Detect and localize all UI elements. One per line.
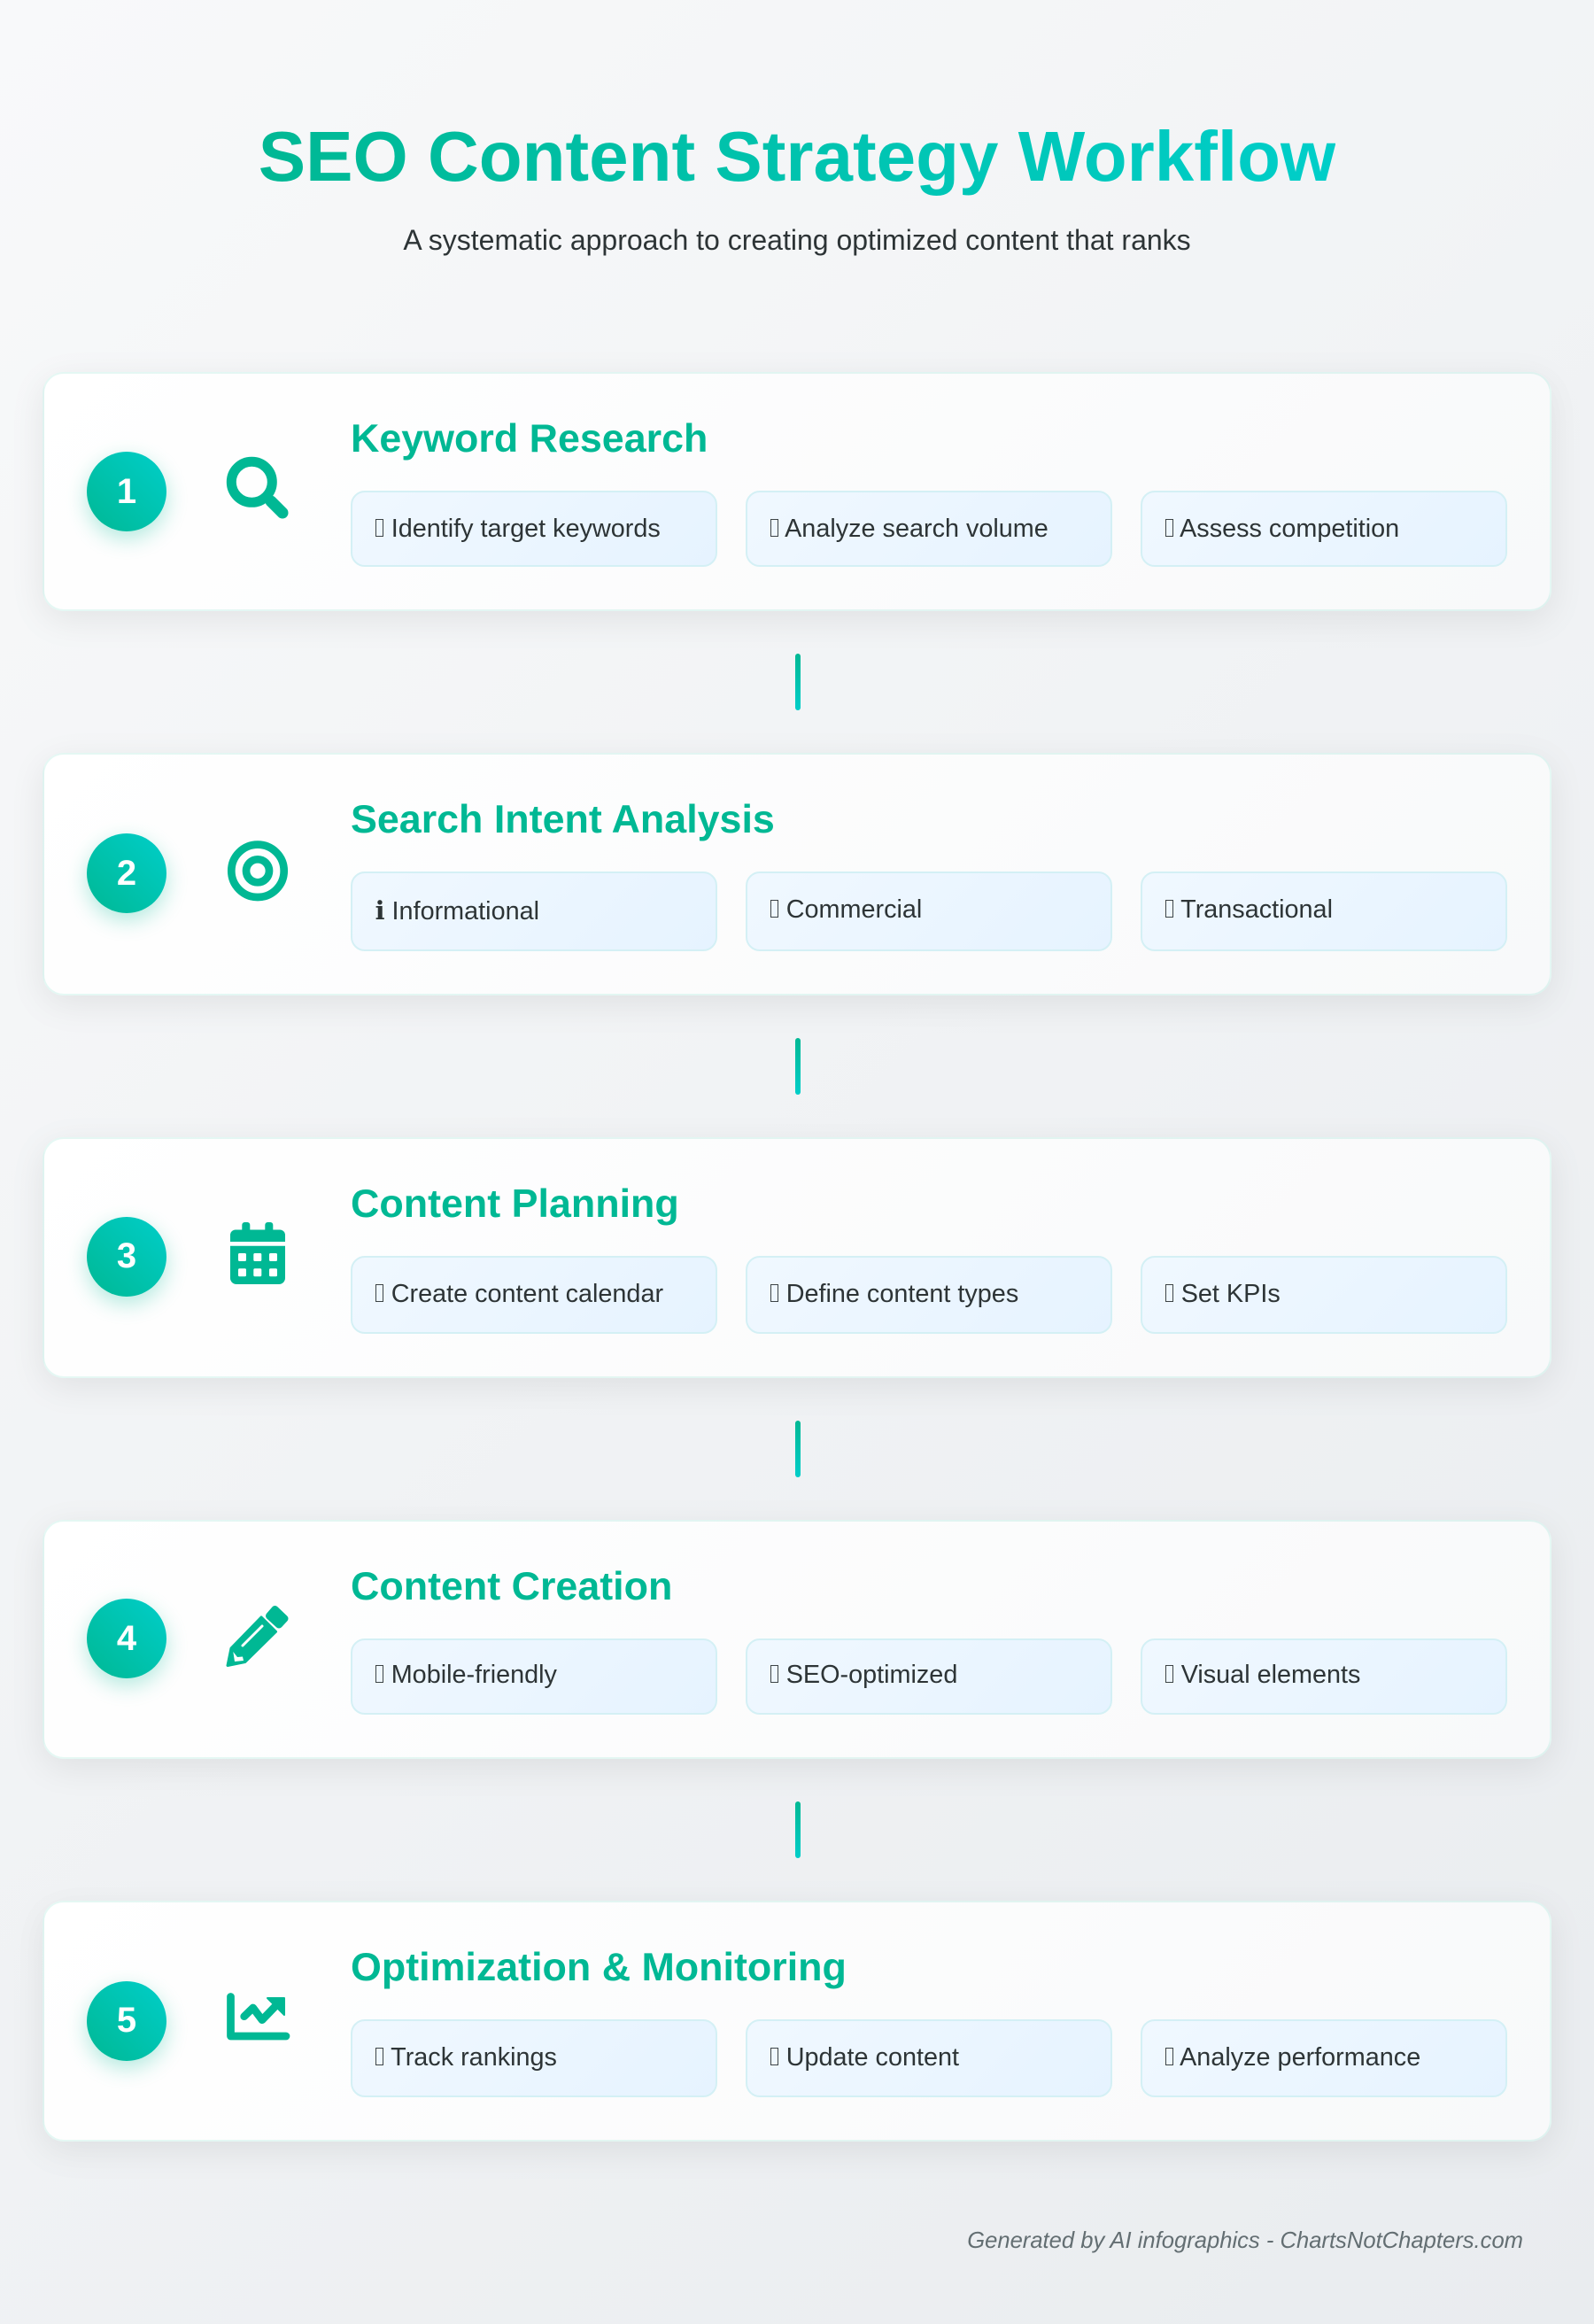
chip: create content calendar: Create content calendar — [391, 1279, 663, 1307]
panel: step 1 keyword research — [43, 372, 1551, 611]
chip: transactional: Transactional — [1180, 895, 1333, 924]
icon: pencil — [227, 1606, 289, 1667]
chip: informational: ℹ︎ Informational — [375, 895, 539, 926]
panel: step 4 content creation — [43, 1520, 1551, 1759]
subtitle: A systematic approach to creating optimized content that ranks — [403, 224, 1191, 256]
chip: mobile-friendly: Mobile-friendly — [391, 1661, 557, 1689]
step number 2 — [87, 833, 166, 913]
step heading: Keyword Research — [351, 416, 708, 461]
arrow: connector 2 to 3 — [795, 1038, 801, 1095]
chip: analyze search volume: Analyze search volume — [785, 514, 1048, 542]
title: SEO Content Strategy Workflow — [259, 117, 1335, 196]
chip: identify target keywords — [351, 491, 717, 567]
arrow: connector 1 to 2 — [795, 654, 801, 710]
chip: track rankings: Track rankings — [391, 2042, 557, 2071]
chip: mobile-friendly — [351, 1638, 717, 1715]
chip: seo-optimized: SEO-optimized — [786, 1661, 957, 1689]
chip: transactional — [1141, 872, 1507, 951]
icon: target — [227, 841, 289, 902]
icon: line chart — [227, 1993, 290, 2041]
chip: assess competition: Assess competition — [1180, 514, 1399, 542]
step number 1: 1 — [117, 471, 136, 510]
step heading: Content Planning — [351, 1181, 679, 1226]
chip: analyze performance: Analyze performance — [1180, 2042, 1420, 2071]
panel: step 3 content planning — [43, 1137, 1551, 1378]
chip: create content calendar — [351, 1256, 717, 1334]
step number 1 — [87, 452, 166, 531]
step heading: Search Intent Analysis — [351, 797, 775, 841]
chip: seo-optimized — [746, 1638, 1112, 1715]
chip: commercial — [746, 872, 1112, 951]
chip: update content: Update content — [786, 2042, 959, 2071]
chip: update content — [746, 2019, 1112, 2097]
chip: set kpis: Set KPIs — [1181, 1279, 1281, 1307]
chip: track rankings — [351, 2019, 717, 2097]
step number 4 — [87, 1599, 166, 1678]
chip: visual elements: Visual elements — [1181, 1661, 1360, 1689]
footer credit: Generated by AI infographics - ChartsNotChapters.com — [967, 2228, 1523, 2253]
step number 3 — [87, 1217, 166, 1297]
step heading: Content Creation — [351, 1564, 672, 1608]
chip: analyze search volume — [746, 491, 1112, 567]
chip: define content types: Define content types — [786, 1279, 1018, 1307]
step heading: Optimization & Monitoring — [351, 1945, 847, 1989]
step number 4: 4 — [117, 1619, 136, 1658]
icon: magnifying glass — [227, 457, 289, 519]
chip: visual elements — [1141, 1638, 1507, 1715]
panel: step 5 optimization and monitoring — [43, 1901, 1551, 2142]
step number 3: 3 — [117, 1236, 136, 1275]
arrow: connector 4 to 5 — [795, 1801, 801, 1858]
step number 2: 2 — [117, 854, 136, 893]
chip: assess competition — [1141, 491, 1507, 567]
chip: set kpis — [1141, 1256, 1507, 1334]
chip: identify target keywords: Identify target keywords — [391, 514, 661, 542]
chip: informational — [351, 872, 717, 951]
step number 5 — [87, 1980, 166, 2060]
chip: define content types — [746, 1256, 1112, 1334]
step number 5: 5 — [117, 2001, 136, 2040]
icon: calendar — [230, 1222, 285, 1284]
arrow: connector 3 to 4 — [795, 1421, 801, 1477]
panel: step 2 search intent analysis — [43, 753, 1551, 995]
chip: commercial: Commercial — [786, 895, 922, 924]
chip: analyze performance — [1141, 2019, 1507, 2097]
